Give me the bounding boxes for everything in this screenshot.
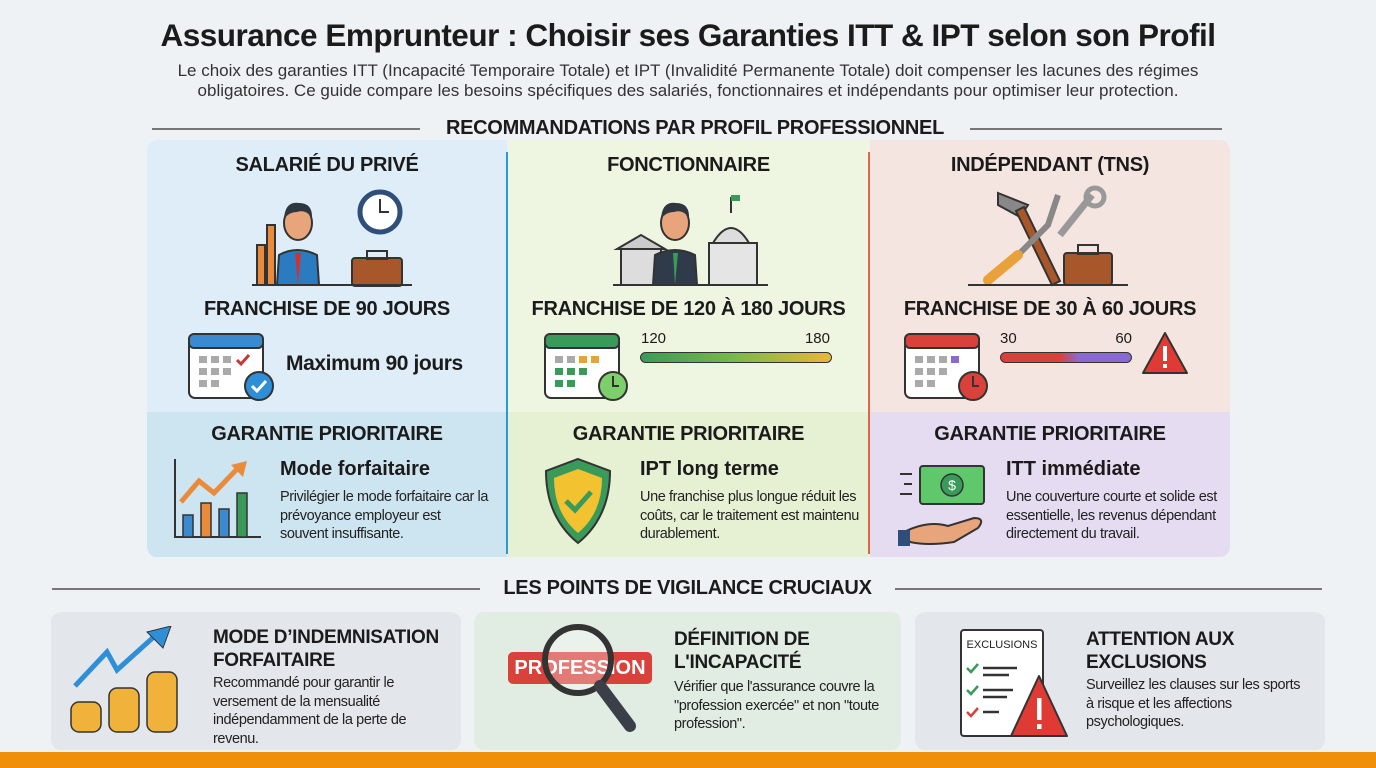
card: définition incapacité: DÉFINITION DE L'INCAPACITÉ <box>674 629 809 673</box>
panel: fonctionnaire <box>508 140 869 557</box>
range bar 120-180: 120 <box>641 330 666 347</box>
garantie block: Privilégier le mode forfaitaire car la prévoyance employeur est souvent insuffisante. <box>280 489 488 542</box>
icon: magnifier profession: PROFESSION <box>514 657 646 679</box>
range bar 30-60: 60 <box>1115 330 1132 347</box>
icon: money hand <box>898 465 985 546</box>
card: mode d'indemnisation: MODE D’INDEMNISATION FORFAITAIRE <box>213 627 439 671</box>
icon: calendar check <box>188 333 274 401</box>
card: exclusions: ATTENTION AUX EXCLUSIONS <box>1086 629 1234 673</box>
range bar 120-180 <box>640 330 832 363</box>
icon: growth chart <box>174 459 261 538</box>
range bar 120-180: 180 <box>805 330 830 347</box>
panel: fonctionnaire: FONCTIONNAIRE <box>607 154 770 176</box>
subtitle: Le choix des garanties ITT (Incapacité Temporaire Totale) et IPT (Invalidité Permanente Totale) doit compenser les lacunes des régimes obligatoires. Ce guide compare les besoins spécifiques des salariés, fonctionnaires et indépendants pour optimiser leur protection. <box>178 61 1198 100</box>
title: Assurance Emprunteur : Choisir ses Garanties ITT & IPT selon son Profil <box>160 17 1216 53</box>
panel: salarié du privé <box>147 140 507 557</box>
garantie block: Une franchise plus longue réduit les coûts, car le traitement est maintenu durablement. <box>640 489 859 542</box>
garantie block: IPT long terme <box>640 458 779 480</box>
heading: SALARIÉ DU PRIVÉ <box>235 154 418 176</box>
range bar 30-60 <box>1000 330 1132 363</box>
card: exclusions <box>915 612 1325 750</box>
icon: money hand: $ <box>948 477 956 493</box>
garantie block: GARANTIE PRIORITAIRE <box>211 423 443 445</box>
footer bar <box>0 752 1376 768</box>
panel: indépendant <box>870 140 1230 557</box>
icon: calendar red <box>904 333 988 401</box>
garantie block: Mode forfaitaire <box>280 458 430 480</box>
text: maximum 90 jours: Maximum 90 jours <box>286 352 463 375</box>
garantie block <box>508 412 869 557</box>
range bar 30-60: 30 <box>1000 330 1017 347</box>
icon: employee <box>252 190 412 287</box>
section heading: recommandations: RECOMMANDATIONS PAR PROFIL PROFESSIONNEL <box>446 117 944 139</box>
garantie block <box>147 412 507 557</box>
franchise heading: FRANCHISE DE 90 JOURS <box>204 298 450 320</box>
card: définition incapacité: Vérifier que l'assurance couvre la "profession exercée" et non "toute profession". <box>674 679 879 732</box>
garantie block <box>870 412 1230 557</box>
section heading: vigilance: LES POINTS DE VIGILANCE CRUCIAUX <box>503 577 872 599</box>
card: exclusions: Surveillez les clauses sur les sports à risque et les affections psychologiques. <box>1086 677 1300 730</box>
icon: magnifier profession <box>508 652 652 684</box>
icon: civil servant <box>613 195 768 286</box>
panel: indépendant: INDÉPENDANT (TNS) <box>951 154 1149 176</box>
icon: tools <box>968 186 1128 286</box>
garantie block: GARANTIE PRIORITAIRE <box>573 423 804 445</box>
card: définition incapacité <box>474 612 901 750</box>
panel: fonctionnaire: FRANCHISE DE 120 À 180 JOURS <box>532 298 845 320</box>
garantie block: ITT immédiate <box>1006 458 1140 480</box>
icon: exclusion list: EXCLUSIONS <box>967 639 1037 651</box>
icon: shield <box>545 458 611 544</box>
card: mode d'indemnisation: Recommandé pour garantir le versement de la mensualité indépendamment de la perte de revenu. <box>213 675 406 746</box>
icon: exclusion list <box>960 629 1068 737</box>
icon: calendar green <box>544 333 628 401</box>
icon: coins <box>70 626 178 733</box>
garantie block: GARANTIE PRIORITAIRE <box>934 423 1166 445</box>
garantie block: Une couverture courte et solide est essentielle, les revenus dépendant directement du travail. <box>1006 489 1217 542</box>
panel: indépendant: FRANCHISE DE 30 À 60 JOURS <box>904 298 1196 320</box>
card: mode d'indemnisation <box>51 612 461 750</box>
icon: warning <box>1142 332 1188 374</box>
